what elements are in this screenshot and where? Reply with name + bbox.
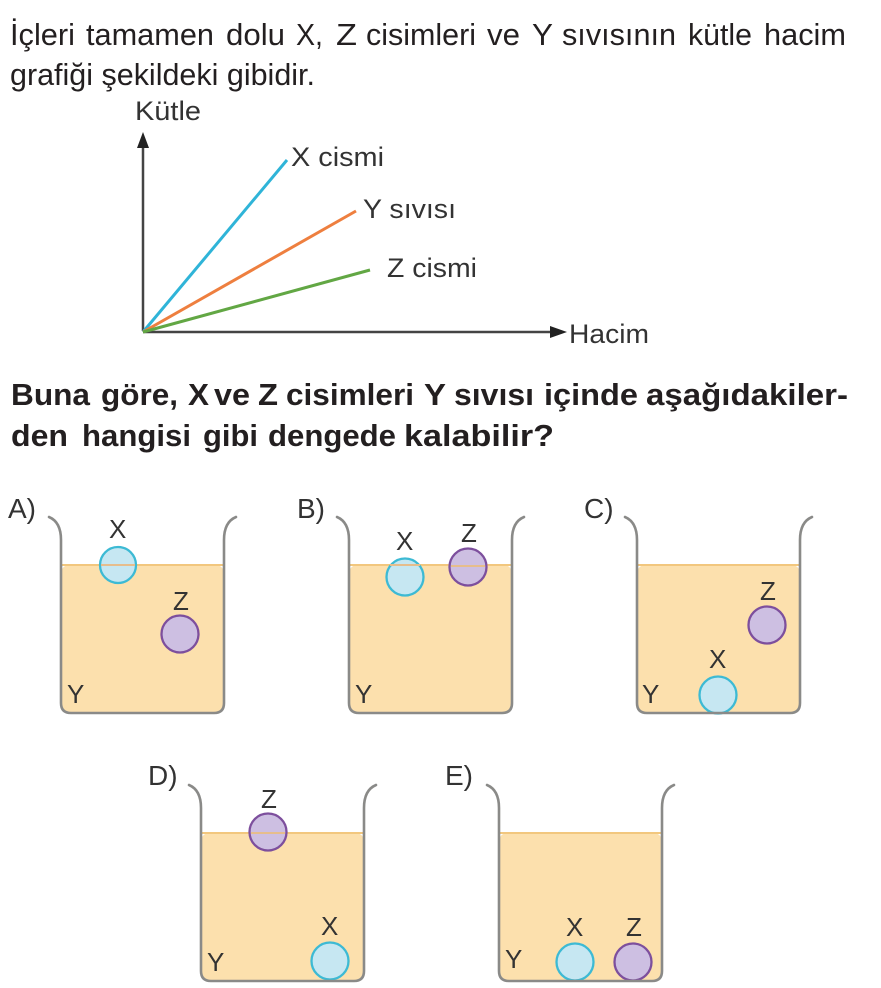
line: Z bbox=[143, 270, 370, 332]
line: X bbox=[143, 160, 287, 332]
question text: grafiği şekildeki gibidir. bbox=[10, 57, 315, 92]
question text: ve bbox=[487, 17, 520, 52]
question text: kütle bbox=[688, 17, 752, 52]
y axis bbox=[137, 132, 149, 331]
bold question: cisimleri bbox=[286, 377, 414, 412]
option A bbox=[8, 493, 236, 713]
option C bbox=[584, 493, 812, 714]
bold question: göre, bbox=[101, 377, 178, 412]
option C: X bbox=[709, 644, 726, 674]
label: X cismi: X cismi bbox=[291, 142, 384, 172]
bold question bbox=[11, 377, 848, 453]
bold question: Buna bbox=[11, 377, 91, 412]
option B: Z bbox=[461, 518, 477, 548]
option D: D) bbox=[148, 760, 178, 791]
question text: X, bbox=[296, 17, 323, 52]
question text: hacim bbox=[764, 17, 846, 52]
label: Z cismi: Z cismi bbox=[387, 253, 477, 283]
question text: cisimleri bbox=[366, 17, 476, 52]
x axis bbox=[143, 326, 567, 338]
option E: Z bbox=[626, 912, 642, 942]
bold question: Z bbox=[258, 377, 278, 412]
option A: Z bbox=[173, 586, 189, 616]
option C: Y bbox=[642, 679, 659, 709]
label: Y sıvısı: Y sıvısı bbox=[363, 194, 456, 224]
option A: Y bbox=[67, 679, 84, 709]
bold question: Y bbox=[424, 377, 446, 412]
option C: C) bbox=[584, 493, 614, 524]
option B: B) bbox=[297, 493, 325, 524]
line: Y bbox=[143, 211, 356, 332]
option B: Y bbox=[355, 679, 372, 709]
option A: X bbox=[109, 514, 126, 544]
mass-volume line chart bbox=[135, 96, 649, 349]
bold question: den bbox=[11, 418, 68, 453]
option D: Z bbox=[261, 784, 277, 814]
question text: Z bbox=[336, 17, 357, 52]
question text: tamamen bbox=[86, 17, 214, 52]
bold question: hangisi bbox=[82, 418, 191, 453]
option C: Z bbox=[760, 576, 776, 606]
bold question: içinde bbox=[544, 377, 638, 412]
bold question: X bbox=[188, 377, 209, 412]
option D bbox=[148, 760, 376, 981]
option D: Y bbox=[207, 947, 224, 977]
axis label: Kütle: Kütle bbox=[135, 96, 201, 126]
bold question: dengede bbox=[268, 418, 396, 453]
option B bbox=[297, 493, 524, 713]
axis label: Hacim: Hacim bbox=[569, 319, 649, 349]
bold question: aşağıdakiler- bbox=[646, 377, 848, 412]
option E bbox=[445, 760, 674, 981]
option B: X bbox=[396, 526, 413, 556]
question text: Y bbox=[532, 17, 553, 52]
bold question: ve bbox=[214, 377, 250, 412]
option E: Y bbox=[505, 944, 522, 974]
option E: X bbox=[566, 912, 583, 942]
option E: E) bbox=[445, 760, 473, 791]
option D: X bbox=[321, 911, 338, 941]
question text bbox=[10, 17, 846, 92]
option A: A) bbox=[8, 493, 36, 524]
bold question: sıvısı bbox=[454, 377, 534, 412]
question text: sıvısının bbox=[562, 17, 676, 52]
bold question: gibi bbox=[203, 418, 258, 453]
question text: İçleri bbox=[10, 17, 75, 52]
bold question: kalabilir? bbox=[404, 418, 554, 453]
question text: dolu bbox=[226, 17, 285, 52]
